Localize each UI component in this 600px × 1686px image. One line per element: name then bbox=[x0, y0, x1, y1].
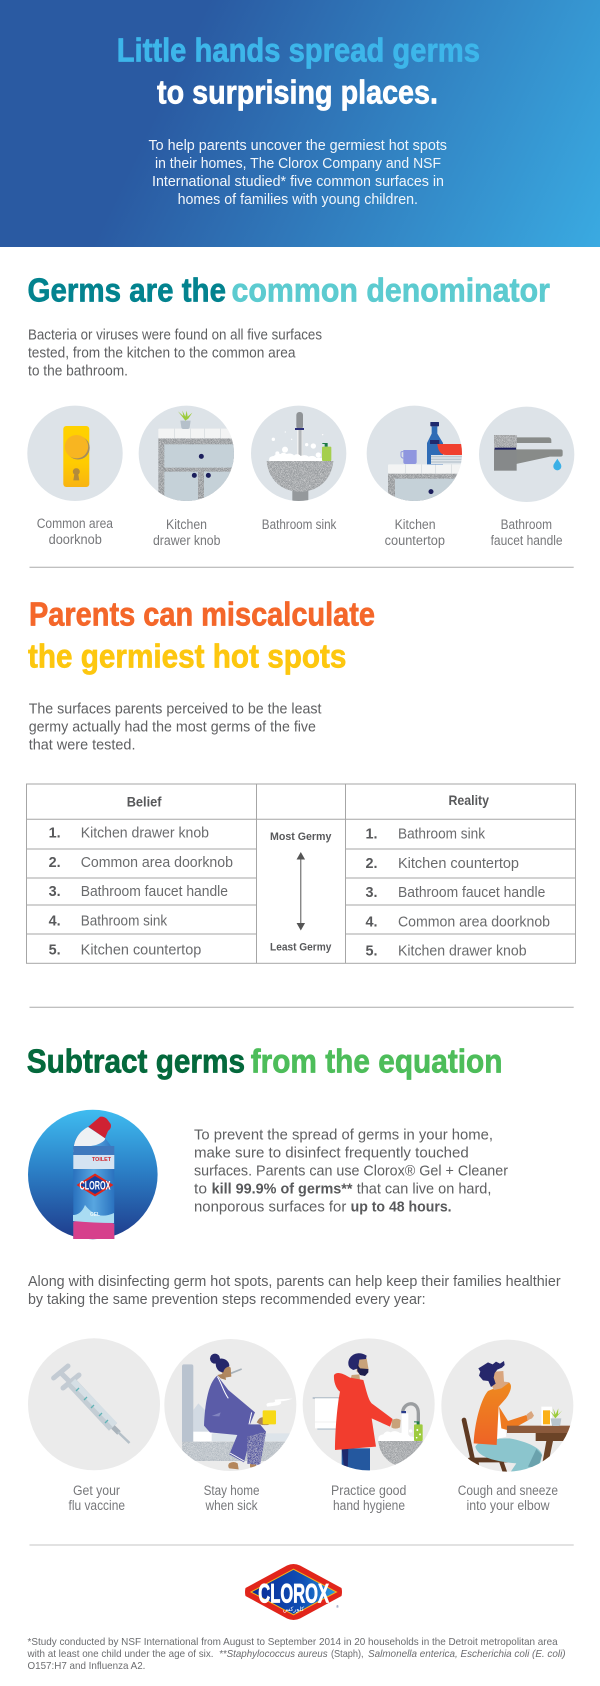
column: reality: Bathroom sink bbox=[398, 827, 486, 843]
column: belief: Kitchen countertop bbox=[81, 943, 201, 959]
logo: Clorox: كلوركس bbox=[283, 1606, 304, 1613]
icon: kitchen countertop bbox=[366, 406, 462, 501]
label: practice good hand hygiene: hand hygiene bbox=[333, 1498, 405, 1513]
text: perceived surfaces bbox=[29, 701, 321, 753]
text: prevent the spread: make sure to disinfect frequently touched bbox=[194, 1145, 469, 1161]
label: cough and sneeze: Cough and sneeze bbox=[458, 1483, 558, 1498]
text: prevent the spread: that can live on hard, bbox=[357, 1181, 491, 1197]
arrow: most to least germy bbox=[297, 853, 304, 930]
column: reality: Kitchen drawer knob bbox=[398, 943, 527, 959]
column: reality: 2. bbox=[366, 856, 378, 872]
label: common area doorknob: doorknob bbox=[49, 532, 102, 547]
icon: common area doorknob bbox=[27, 406, 123, 501]
column: germiness scale bbox=[270, 831, 332, 953]
footnote: (Staph), bbox=[331, 1649, 364, 1660]
hero title bbox=[117, 33, 480, 112]
icon: flu vaccine syringe bbox=[28, 1338, 160, 1470]
icon: bathroom sink bbox=[251, 406, 346, 505]
label: cough and sneeze bbox=[458, 1483, 558, 1513]
text: along with disinfecting bbox=[28, 1274, 561, 1308]
text: bacteria or viruses: tested, from the kitchen to the common area bbox=[28, 346, 296, 362]
panel: hero header bbox=[0, 0, 600, 247]
heading: subtract germs bbox=[27, 1044, 503, 1081]
text: prevent the spread: to bbox=[194, 1181, 207, 1197]
column: reality bbox=[366, 792, 550, 959]
heading: common denominator: common denominator bbox=[232, 273, 550, 310]
icon: kitchen drawer knob bbox=[139, 406, 238, 505]
footnote: *Study conducted by NSF International from August to September 2014 in 20 households in the Detroit metropolitan area bbox=[28, 1637, 558, 1648]
label: stay home when sick: when sick bbox=[205, 1498, 258, 1513]
text: prevent the spread: surfaces. Parents can use Clorox® Gel + Cleaner bbox=[194, 1163, 508, 1179]
text: prevent the spread: nonporous surfaces for bbox=[194, 1199, 346, 1215]
column: reality: 4. bbox=[366, 914, 378, 930]
heading: common denominator bbox=[28, 273, 550, 310]
logo: Clorox: ® bbox=[336, 1604, 339, 1609]
text: prevent the spread bbox=[194, 1127, 508, 1215]
column: reality: 1. bbox=[366, 827, 378, 843]
text: bacteria or viruses: to the bathroom. bbox=[28, 364, 128, 380]
logo: Clorox: CLOROX bbox=[258, 1579, 329, 1609]
icon: sick woman on bed bbox=[164, 1339, 296, 1471]
column: belief bbox=[49, 794, 233, 959]
label: get your flu vaccine: flu vaccine bbox=[68, 1498, 125, 1513]
column: germiness scale: Least Germy bbox=[270, 941, 332, 953]
text: prevent the spread: kill 99.9% of germs** bbox=[212, 1181, 353, 1197]
label: bathroom faucet handle bbox=[491, 517, 563, 548]
hero intro text: homes of families with young children. bbox=[178, 192, 418, 208]
label: get your flu vaccine: Get your bbox=[73, 1483, 120, 1498]
text: along with disinfecting: by taking the same prevention steps recommended every year: bbox=[28, 1292, 426, 1308]
column: reality: Common area doorknob bbox=[398, 914, 550, 930]
label: kitchen countertop: Kitchen bbox=[395, 517, 436, 532]
text: perceived surfaces: that were tested. bbox=[29, 737, 136, 753]
label: kitchen drawer knob: drawer knob bbox=[153, 533, 220, 548]
column: belief: Bathroom faucet handle bbox=[81, 884, 228, 900]
hero title: to surprising places. bbox=[157, 74, 438, 112]
column: reality: Kitchen countertop bbox=[398, 856, 519, 872]
label: get your flu vaccine bbox=[68, 1483, 125, 1513]
product image: Clorox gel bottle: GEL bbox=[90, 1212, 101, 1218]
text: prevent the spread: up to 48 hours. bbox=[351, 1199, 452, 1215]
footnote: with at least one child under the age of six. bbox=[27, 1649, 214, 1660]
text: bacteria or viruses: Bacteria or viruses were found on all five surfaces bbox=[28, 328, 322, 344]
heading: subtract germs: Subtract germs bbox=[27, 1044, 245, 1081]
label: bathroom faucet handle: faucet handle bbox=[491, 533, 563, 548]
text: prevent the spread: To prevent the spread of germs in your home, bbox=[194, 1127, 493, 1143]
column: belief: 4. bbox=[49, 913, 61, 929]
footnote bbox=[27, 1637, 566, 1672]
footnote: O157:H7 and Influenza A2. bbox=[28, 1661, 145, 1672]
text: perceived surfaces: germy actually had the most germs of the five bbox=[29, 719, 316, 735]
hero intro text: International studied* five common surfaces in bbox=[152, 174, 444, 190]
panel: germs are the common denominator bbox=[27, 273, 574, 548]
label: kitchen drawer knob: Kitchen bbox=[166, 517, 207, 532]
product image: Clorox gel bottle: CLOROX bbox=[80, 1178, 110, 1192]
hero intro text: To help parents uncover the germiest hot spots bbox=[148, 138, 447, 154]
icon: person coughing into elbow bbox=[441, 1340, 573, 1473]
column: belief: 1. bbox=[49, 826, 61, 842]
column: belief: Bathroom sink bbox=[81, 913, 168, 929]
label: kitchen drawer knob bbox=[153, 517, 220, 548]
label: stay home when sick: Stay home bbox=[204, 1483, 260, 1498]
text: perceived surfaces: The surfaces parents perceived to be the least bbox=[29, 701, 321, 717]
icon: bathroom faucet handle bbox=[479, 407, 574, 502]
hero title: Little hands spread germs bbox=[117, 33, 480, 70]
text: bacteria or viruses bbox=[28, 328, 322, 380]
panel: subtract germs bbox=[27, 1044, 573, 1513]
label: practice good hand hygiene: Practice good bbox=[331, 1483, 406, 1498]
column: belief: Belief bbox=[127, 794, 162, 810]
text: along with disinfecting: Along with disinfecting germ hot spots, parents can help keep their families healthier bbox=[28, 1274, 561, 1290]
label: common area doorknob bbox=[37, 516, 113, 547]
heading: common denominator: Germs are the bbox=[28, 273, 226, 310]
column: reality: Reality bbox=[448, 792, 489, 808]
label: cough and sneeze: into your elbow bbox=[466, 1498, 550, 1513]
logo: Clorox bbox=[245, 1564, 342, 1620]
heading: miscalculate bbox=[28, 597, 375, 676]
column: reality: Bathroom faucet handle bbox=[398, 885, 545, 901]
footnote: Salmonella enterica, Escherichia coli (E. coli) bbox=[368, 1649, 566, 1660]
label: bathroom faucet handle: Bathroom bbox=[501, 517, 552, 532]
label: kitchen countertop: countertop bbox=[385, 533, 445, 548]
column: belief: 2. bbox=[49, 855, 61, 871]
product image: Clorox gel bottle: TOILET bbox=[92, 1157, 111, 1163]
heading: miscalculate: the germiest hot spots bbox=[28, 639, 346, 676]
heading: subtract germs: from the equation bbox=[251, 1044, 502, 1081]
heading: miscalculate: Parents can miscalculate bbox=[29, 597, 375, 634]
label: practice good hand hygiene bbox=[331, 1483, 406, 1513]
hero intro text: in their homes, The Clorox Company and NSF bbox=[155, 156, 441, 172]
table: belief vs reality bbox=[26, 784, 576, 963]
label: common area doorknob: Common area bbox=[37, 516, 113, 531]
icon: man washing hands bbox=[303, 1338, 435, 1472]
column: germiness scale: Most Germy bbox=[270, 831, 332, 843]
column: belief: Common area doorknob bbox=[81, 855, 233, 871]
column: belief: 5. bbox=[49, 943, 61, 959]
column: reality: 5. bbox=[366, 943, 378, 959]
column: belief: Kitchen drawer knob bbox=[81, 826, 209, 842]
column: reality: 3. bbox=[366, 885, 378, 901]
footnote: **Staphylococcus aureus bbox=[219, 1649, 328, 1660]
product image: Clorox gel bottle bbox=[28, 1110, 158, 1239]
label: kitchen countertop bbox=[385, 517, 445, 548]
label: bathroom sink: Bathroom sink bbox=[262, 517, 337, 532]
column: belief: 3. bbox=[49, 884, 61, 900]
label: stay home when sick bbox=[204, 1483, 260, 1513]
hero intro text bbox=[148, 138, 447, 208]
panel: parents can miscalculate bbox=[26, 597, 576, 963]
